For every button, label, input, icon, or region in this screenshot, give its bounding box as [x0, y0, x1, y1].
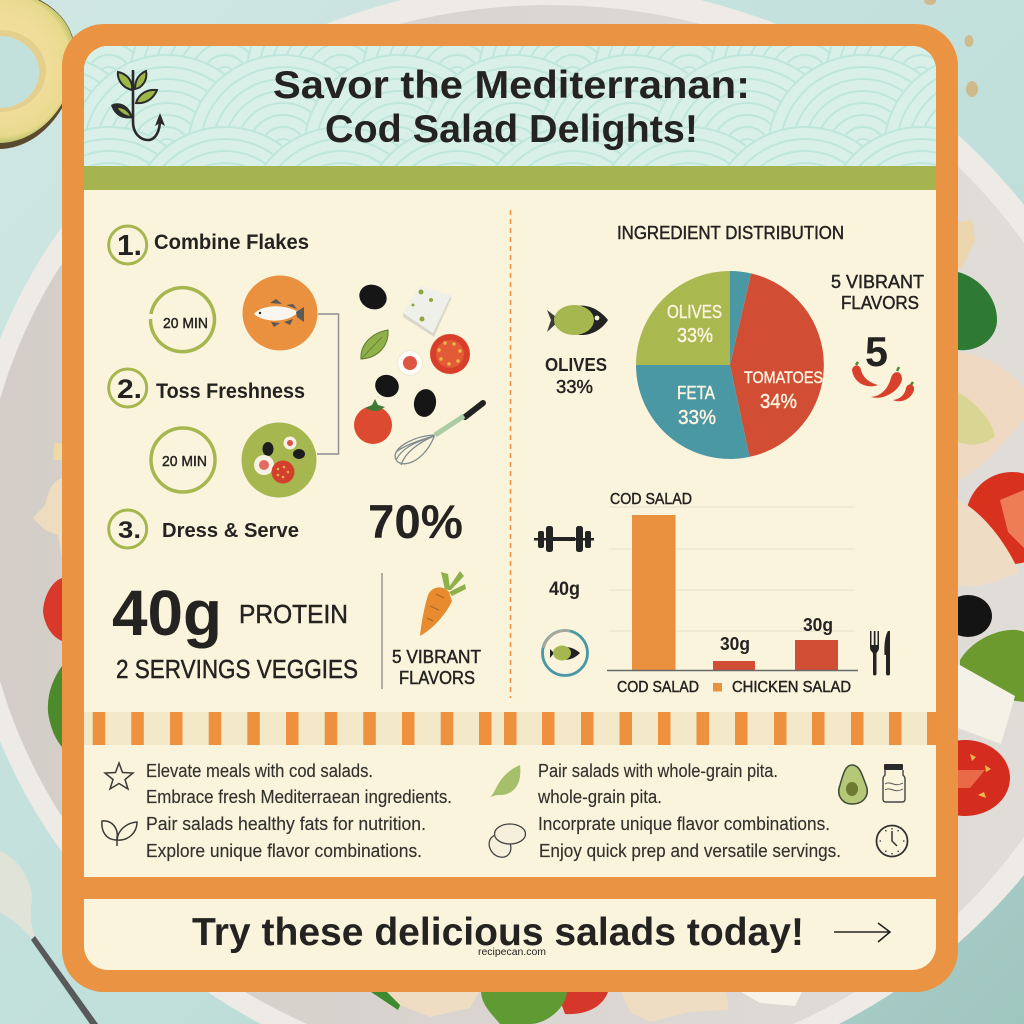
tips: right column — [537, 761, 841, 861]
stat: 70%: 70% — [368, 495, 463, 548]
connector lines — [317, 314, 338, 454]
stat: 40g protein — [112, 577, 348, 649]
icon: jar — [883, 764, 905, 802]
pie chart: ingredient distribution: FETA — [677, 383, 715, 403]
panel: call to action — [84, 899, 936, 970]
stat: 40g protein: 40g — [112, 577, 222, 649]
tips: right column: Pair salads with whole-grain pita. — [538, 761, 778, 781]
bar chart: protein comparison — [607, 491, 858, 696]
icon: clock — [876, 826, 908, 856]
call to action text: Try these delicious salads today! — [192, 911, 804, 954]
tips: right column: Incorprate unique flavor combinations. — [538, 814, 830, 834]
step 2 heading: 2. — [117, 374, 142, 404]
label: olives 33% (left): 33% — [556, 377, 593, 397]
panel: tips — [84, 745, 936, 877]
food on plate: right side — [958, 220, 1024, 816]
dashed divider — [510, 210, 512, 698]
step 2 heading — [109, 369, 305, 407]
timer ring 2: 20 MIN — [162, 453, 207, 470]
step 3 heading: Dress & Serve — [162, 520, 299, 542]
icon: fork and knife — [870, 631, 890, 676]
panel: main cream content — [84, 190, 936, 712]
pie chart: ingredient distribution: 33% — [678, 407, 716, 429]
title: Savor the Mediterranan: — [273, 64, 750, 107]
pie chart: ingredient distribution: OLIVES — [667, 302, 722, 322]
tips: right column: whole-grain pita. — [537, 787, 662, 807]
label: 5 vibrant flavors (right): 5 — [865, 328, 888, 375]
label: olives 33% (left): OLIVES — [545, 355, 607, 375]
ingredient illustrations — [354, 280, 470, 444]
step 3 heading: 3. — [118, 517, 141, 544]
label: olives 33% (left) — [545, 355, 607, 397]
heading: ingredient distribution: INGREDIENT DISTRIBUTION — [617, 223, 844, 243]
bar chart: protein comparison: CHICKEN SALAD — [732, 679, 851, 696]
icon: pita bread — [485, 824, 526, 862]
food on plate: bottom — [371, 992, 802, 1024]
step 1 heading: 1. — [117, 230, 142, 262]
striped ribbon — [84, 712, 936, 745]
tips: left column: Explore unique flavor combinations. — [146, 841, 422, 861]
icon: carrot — [420, 571, 466, 636]
icon: green leaf — [490, 765, 520, 797]
tips: right column: Enjoy quick prep and versatile servings. — [539, 841, 841, 861]
label: 5 vibrant flavors (left): 5 VIBRANT — [392, 647, 481, 667]
green band — [84, 166, 936, 190]
timer ring 1: 20 MIN — [163, 315, 208, 332]
icon: fish in progress ring — [542, 630, 588, 676]
icon: arrow — [834, 923, 890, 942]
icon: fish with olive body — [547, 305, 608, 335]
icon: avocado — [839, 765, 867, 804]
title: Cod Salad Delights! — [325, 108, 698, 151]
food on plate: left side — [33, 443, 62, 747]
label: 40g: 40g — [549, 579, 580, 600]
step 1 heading: Combine Flakes — [154, 231, 309, 254]
timer ring 1 — [150, 288, 214, 352]
bar chart: protein comparison: COD SALAD — [617, 679, 699, 696]
stat: 40g protein: PROTEIN — [239, 599, 348, 629]
icon: whisk — [395, 403, 483, 465]
bar chart: protein comparison: COD SALAD — [610, 491, 692, 508]
icon: chili peppers — [852, 362, 914, 401]
label: 5 vibrant flavors (left) — [392, 647, 481, 688]
icon: twin leaves outline — [102, 821, 137, 846]
tips: left column: Embrace fresh Mediterraean ingredients. — [146, 787, 452, 807]
pie chart: ingredient distribution — [636, 271, 824, 459]
spoon — [0, 851, 98, 1024]
label: 5 vibrant flavors (right): 5 VIBRANT — [831, 272, 924, 292]
tips: left column: Pair salads healthy fats for nutrition. — [146, 814, 426, 834]
pie chart: ingredient distribution: 34% — [760, 391, 797, 413]
panel: header with wave pattern — [84, 46, 936, 166]
watermark: recipecan.com — [478, 947, 546, 958]
step 2 heading: Toss Freshness — [156, 380, 305, 403]
sesame seeds — [924, 0, 978, 97]
stat: 2 servings veggies: 2 SERVINGS VEGGIES — [116, 654, 358, 684]
icon: sprout with fish hook — [111, 70, 165, 140]
icon: star — [105, 763, 133, 789]
step 3 heading — [109, 510, 299, 548]
icon: salad on green circle — [242, 422, 316, 498]
tips: left column — [146, 761, 452, 861]
icon: fish on orange circle — [242, 276, 318, 350]
label: 5 vibrant flavors (right): FLAVORS — [841, 293, 919, 313]
pie chart: ingredient distribution: TOMATOES — [744, 368, 823, 387]
step 1 heading — [109, 226, 309, 264]
bar chart: protein comparison: 30g — [720, 634, 750, 654]
label: 5 vibrant flavors (right) — [831, 272, 924, 375]
label: 5 vibrant flavors (left): FLAVORS — [399, 668, 475, 688]
avocado half — [0, 0, 76, 149]
pie chart: ingredient distribution: 33% — [677, 325, 713, 347]
bar chart: protein comparison: 30g — [803, 615, 833, 635]
vertical rule — [381, 573, 383, 689]
icon: dumbbell — [534, 526, 594, 552]
title — [273, 64, 750, 151]
tips: left column: Elevate meals with cod salads. — [146, 761, 373, 781]
timer ring 2 — [151, 428, 215, 492]
